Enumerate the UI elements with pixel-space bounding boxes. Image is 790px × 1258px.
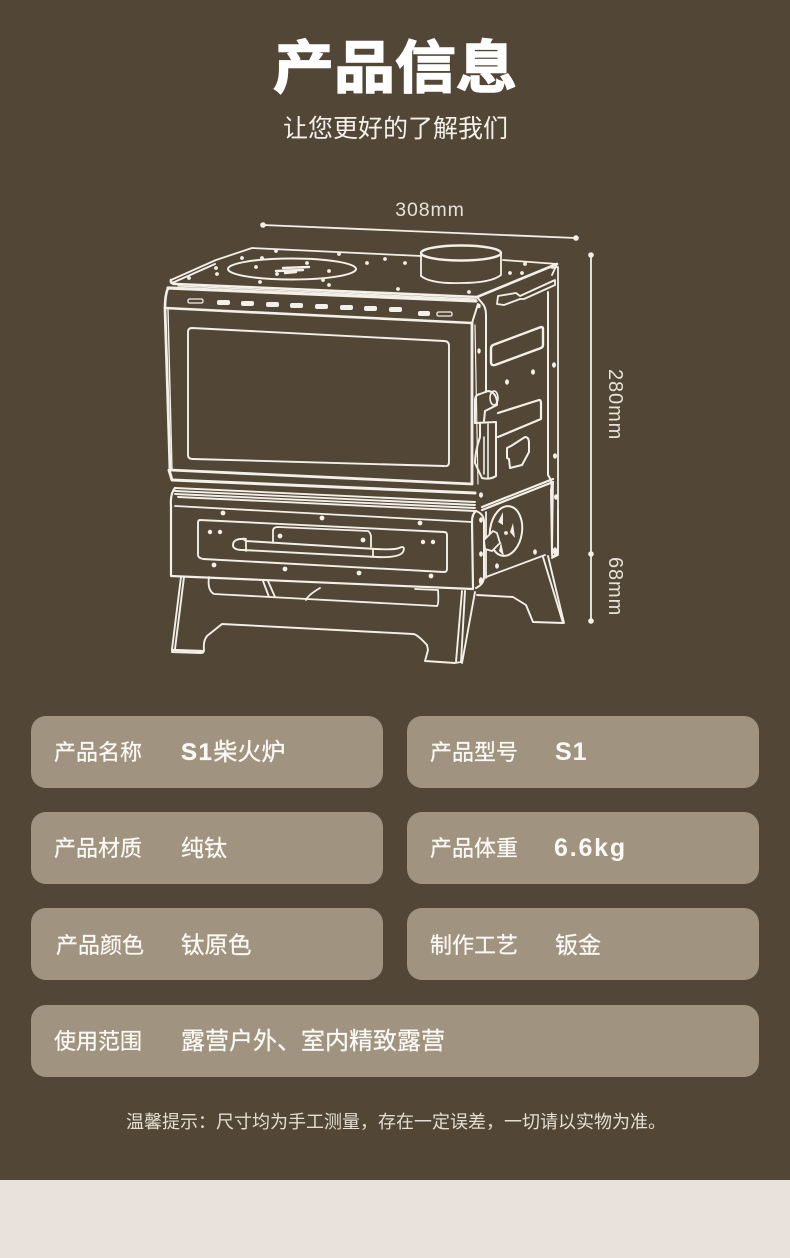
label: 产品颜色 [56, 933, 144, 958]
title: 产品信息 [273, 36, 517, 100]
label: 产品型号 [430, 740, 518, 765]
label: 制作工艺 [430, 933, 518, 958]
value: 露营户外、室内精致露营 [181, 1028, 445, 1055]
dimension: height 280mm and 68mm: 68mm [604, 557, 626, 616]
value: 钣金 [555, 932, 601, 958]
stove top plate [171, 248, 557, 299]
value: S1 [555, 738, 588, 766]
row: material [31, 812, 383, 884]
stove lower side with air vent [476, 479, 558, 588]
stove lower body [171, 488, 476, 589]
dimension: width 308mm [260, 199, 579, 241]
knob plate [507, 437, 529, 468]
label: 产品名称 [54, 740, 142, 765]
stove side panel [472, 264, 558, 557]
dimension: height 280mm and 68mm: 280mm [604, 369, 626, 440]
dimension: height 280mm and 68mm [588, 252, 626, 624]
stove upper body [165, 288, 478, 493]
value: 6.6kg [554, 834, 627, 862]
footnote: 温馨提示：尺寸均为手工测量，存在一定误差，一切请以实物为准。 [126, 1112, 666, 1132]
hinge and latch [475, 391, 497, 423]
row: weight [407, 812, 759, 884]
label: 使用范围 [54, 1029, 142, 1054]
row: colour [31, 908, 383, 980]
stove legs [172, 556, 564, 663]
row: product model [407, 716, 759, 788]
stove line drawing with dimensions [164, 199, 626, 664]
flue collar [421, 246, 501, 283]
subtitle: 让您更好的了解我们 [283, 115, 508, 143]
label: 产品体重 [430, 836, 518, 861]
value: S1柴火炉 [181, 739, 285, 766]
bottom band [0, 1180, 790, 1258]
row: product name [31, 716, 383, 788]
value: 纯钛 [181, 835, 227, 861]
dimension: width 308mm: 308mm [395, 199, 465, 221]
row: usage [31, 1005, 759, 1077]
value: 钛原色 [181, 932, 252, 958]
row: craft [407, 908, 759, 980]
vent slots [188, 299, 452, 316]
label: 产品材质 [54, 836, 142, 861]
